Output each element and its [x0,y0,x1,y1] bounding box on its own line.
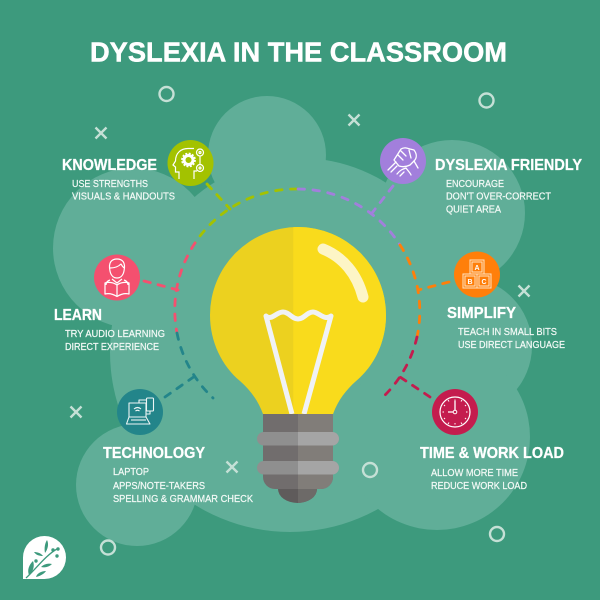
heading: KNOWLEDGE [62,157,157,174]
panel: simplify [447,252,565,351]
icon: student reading [94,254,140,300]
connector: dyslexia friendly [372,186,393,213]
text block: TEACH IN SMALL BITS [458,327,557,338]
icon: alphabet blocks [454,252,500,298]
connector: simplify [418,282,449,290]
icon: head with gears [168,140,214,186]
connector: time and work load [400,377,430,397]
heading: TIME & WORK LOAD [420,445,564,462]
text block [458,327,565,351]
panel: dyslexia friendly [380,138,583,216]
icon: alphabet blocks: B [467,279,473,286]
text block: ENCOURAGE [446,179,504,190]
text block: APPS/NOTE-TAKERS [113,481,205,492]
heading: SIMPLIFY [447,305,517,322]
logo: leaf branch [23,536,66,579]
text block: DON'T OVER-CORRECT [446,192,551,202]
dashed ring around bulb [175,189,420,398]
text block: DIRECT EXPERIENCE [65,342,159,353]
icon: alphabet blocks: C [481,279,487,286]
heading: TECHNOLOGY [103,445,206,462]
connector: knowledge [207,184,230,209]
text block: USE DIRECT LANGUAGE [458,340,565,351]
text block [431,468,527,492]
icon: alphabet blocks: A [474,265,480,272]
background cloud shape [53,96,532,546]
connector: technology [165,376,195,397]
text block: VISUALS & HANDOUTS [72,192,175,202]
text block: USE STRENGTHS [72,179,148,190]
text block: LAPTOP [113,467,149,478]
panel: learn [54,254,165,353]
icon: clasped hands [380,138,426,184]
text block: ALLOW MORE TIME [431,468,518,479]
decorative crosses [70,114,530,472]
icon: clock [432,389,478,435]
text block: REDUCE WORK LOAD [431,481,527,492]
text block [72,179,175,202]
text block [113,467,253,505]
light bulb [210,227,386,503]
icon: laptop and phone [117,389,163,435]
text block [446,179,551,216]
text block: TRY AUDIO LEARNING [65,329,165,340]
heading: DYSLEXIA FRIENDLY [435,157,583,174]
text block [65,329,165,353]
panel: technology [103,389,253,505]
title: DYSLEXIA IN THE CLASSROOM [90,36,507,68]
text block: SPELLING & GRAMMAR CHECK [113,494,253,505]
decorative rings [101,87,504,554]
heading: LEARN [54,307,102,324]
connector: learn [144,281,178,290]
panel: time and work load [420,389,564,492]
panel: knowledge [62,140,214,202]
text block: QUIET AREA [446,204,501,216]
